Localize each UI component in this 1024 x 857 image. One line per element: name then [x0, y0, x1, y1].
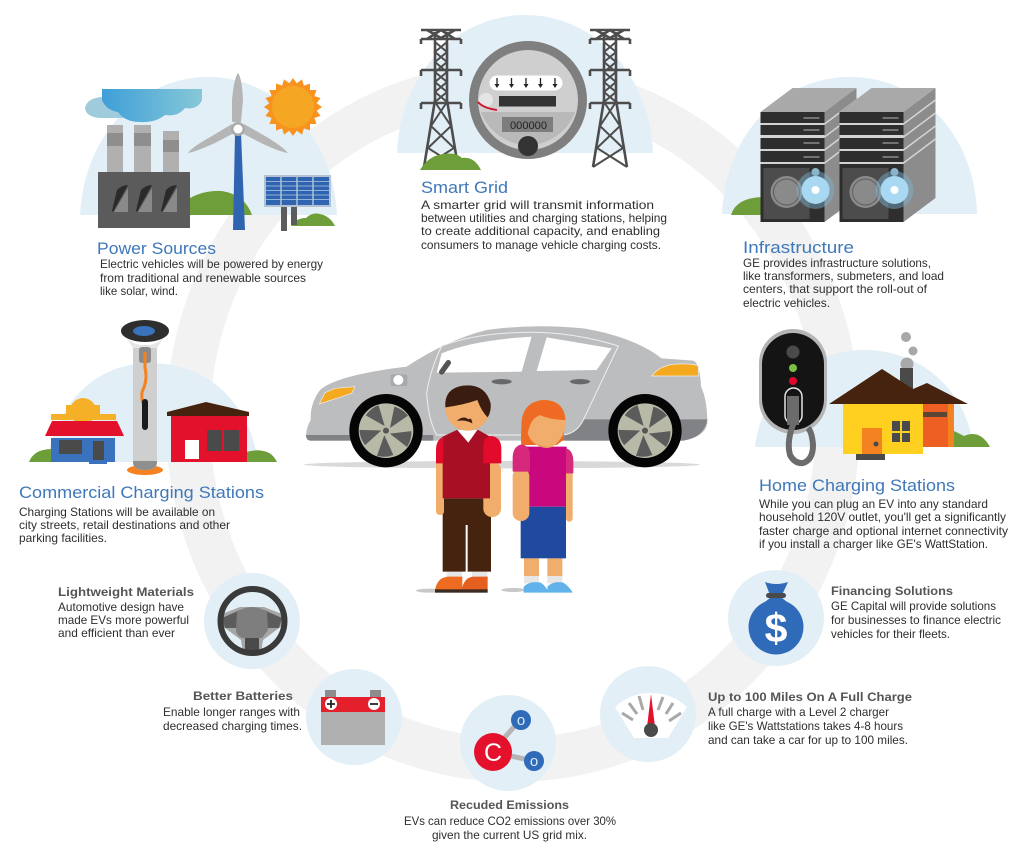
- panel: home charging stations: [755, 329, 1008, 551]
- panel: infrastructure: [722, 77, 977, 310]
- text block: given the current US grid mix.: [432, 828, 587, 842]
- text block: decreased charging times.: [163, 719, 302, 733]
- icon circle: [306, 669, 402, 765]
- text block: [58, 600, 189, 640]
- icon: CO2 molecule: [474, 710, 544, 771]
- text block: A smarter grid will transmit information: [421, 198, 654, 212]
- text block: [100, 257, 323, 298]
- icon: wall charger: [759, 329, 827, 463]
- icon: green hills: [29, 449, 277, 462]
- text block: Charging Stations will be available on: [19, 505, 215, 519]
- text block: like solar, wind.: [100, 284, 178, 298]
- illustration: man: [416, 385, 501, 593]
- icon: green hills: [190, 191, 335, 226]
- car door outline: [427, 332, 618, 435]
- man sleeves: [436, 436, 501, 463]
- man shoes: [416, 572, 488, 593]
- heading: Infrastructure: [743, 238, 854, 257]
- door handles: [492, 379, 590, 384]
- icon: red building: [167, 402, 249, 462]
- heading: Recuded Emissions: [450, 798, 569, 812]
- car shadow: [304, 461, 700, 468]
- icon: electric meter: 000000: [510, 120, 547, 132]
- car body: [306, 326, 707, 441]
- woman shoes: [501, 558, 573, 593]
- text block: city streets, retail destinations and other: [19, 518, 230, 532]
- icon: electric meter: [469, 41, 587, 159]
- text block: A full charge with a Level 2 charger: [708, 705, 889, 719]
- icon: right pylon: [590, 30, 630, 167]
- panel: smart grid: [397, 15, 667, 252]
- man trousers: [443, 498, 491, 572]
- icon: sun: [264, 78, 322, 136]
- text block: [708, 705, 908, 747]
- heading: Commercial Charging Stations: [19, 483, 264, 502]
- icon: green hill: [420, 154, 481, 170]
- icon: money bag: [748, 582, 804, 654]
- text block: like GE's Wattstations takes 4-8 hours: [708, 719, 903, 733]
- text block: household 120V outlet, you'll get a significantly: [759, 510, 1006, 524]
- car windows: [437, 337, 612, 373]
- front wheel: [349, 394, 423, 467]
- icon: shop: [45, 398, 124, 464]
- icon: steering wheel: [220, 589, 284, 653]
- rear wheel: [608, 394, 682, 467]
- icon: gauge: [615, 693, 687, 738]
- text block: made EVs more powerful: [58, 613, 189, 627]
- icon: battery: [321, 690, 385, 745]
- text block: [404, 814, 616, 842]
- text block: [759, 497, 1008, 551]
- icon: solar panel: [264, 175, 331, 231]
- text block: consumers to manage vehicle charging costs.: [421, 238, 661, 252]
- text block: [19, 505, 230, 545]
- icon circle: [600, 666, 696, 762]
- panel: financing solutions: [728, 570, 1001, 666]
- text block: vehicles for their fleets.: [831, 627, 950, 641]
- heading: Up to 100 Miles On A Full Charge: [708, 690, 912, 704]
- text block: centers, that support the roll-out of: [743, 282, 928, 296]
- illustration: dome background: [722, 77, 977, 214]
- illustration: dome background: [397, 15, 653, 153]
- woman top: [522, 447, 567, 507]
- headlight: [319, 387, 355, 404]
- car seat: [442, 363, 448, 372]
- text block: EVs can reduce CO2 emissions over 30%: [404, 814, 616, 828]
- illustration: dome background: [755, 350, 973, 447]
- heading: Smart Grid: [421, 178, 508, 197]
- text block: from traditional and renewable sources: [100, 271, 306, 285]
- icon: money bag: $: [765, 605, 788, 651]
- text block: and efficient than ever: [58, 626, 175, 640]
- woman arms: [513, 468, 573, 522]
- woman hair back: [521, 400, 565, 445]
- car sill: [306, 419, 707, 441]
- illustration: woman: [501, 400, 573, 593]
- text block: and can take a car for up to 100 miles.: [708, 733, 908, 747]
- text block: [421, 198, 667, 252]
- icon circle: [460, 695, 556, 791]
- text block: Enable longer ranges with: [163, 705, 300, 719]
- heading: Power Sources: [97, 239, 216, 258]
- text block: between utilities and charging stations, helping: [421, 211, 667, 225]
- text block: if you install a charger like GE's WattStation.: [759, 537, 988, 551]
- text block: [831, 599, 1001, 641]
- icon: green hill: [954, 431, 990, 447]
- illustration: dome background: [80, 77, 337, 215]
- woman head: [521, 400, 565, 448]
- text block: Automotive design have: [58, 600, 184, 614]
- icon: wind turbine: [188, 73, 288, 230]
- fuel cap: [391, 374, 407, 386]
- panel: power sources: [80, 73, 337, 298]
- heading: Home Charging Stations: [759, 476, 955, 495]
- panel: reduced emissions: [404, 695, 616, 842]
- text block: GE provides infrastructure solutions,: [743, 256, 931, 270]
- man collar: [457, 430, 477, 443]
- icon circle: [728, 570, 824, 666]
- text block: While you can plug an EV into any standard: [759, 497, 988, 511]
- text block: Electric vehicles will be powered by energy: [100, 257, 323, 271]
- man arms: [436, 462, 501, 517]
- icon: CO2 molecule: C: [484, 739, 502, 767]
- icon: clouds: [85, 89, 202, 122]
- icon: server two: [840, 88, 936, 222]
- illustration: car: [304, 326, 707, 468]
- icon: CO2 molecule: o: [517, 712, 525, 729]
- text block: parking facilities.: [19, 531, 107, 545]
- panel: commercial charging stations: [19, 320, 277, 545]
- heading: Financing Solutions: [831, 584, 953, 598]
- icon: left pylon: [421, 30, 461, 167]
- text block: [743, 256, 944, 310]
- icon circle: [204, 573, 300, 669]
- background ring: [188, 84, 838, 760]
- text block: electric vehicles.: [743, 296, 830, 310]
- text block: like transformers, submeters, and load: [743, 269, 944, 283]
- man shirt: [443, 430, 490, 498]
- icon: server one: [760, 88, 856, 222]
- illustration: dome background: [47, 363, 258, 462]
- tail light: [652, 364, 698, 376]
- icon: factory: [98, 125, 190, 228]
- heading: Better Batteries: [193, 689, 293, 703]
- panel: lightweight materials: [58, 573, 300, 669]
- panel: better batteries: [163, 669, 402, 765]
- woman sleeves: [513, 444, 573, 473]
- panel: range: [600, 666, 912, 762]
- man head: [445, 385, 491, 431]
- heading: Lightweight Materials: [58, 585, 194, 599]
- text block: [163, 705, 302, 733]
- woman skirt: [521, 507, 566, 558]
- text block: for businesses to finance electric: [831, 613, 1001, 627]
- icon: charging post: [121, 320, 169, 475]
- icon: house: [829, 332, 968, 460]
- icon: CO2 molecule: o: [530, 753, 538, 770]
- icon: green hill: [731, 197, 762, 215]
- text block: faster charge and optional internet connectivity: [759, 524, 1008, 538]
- text block: GE Capital will provide solutions: [831, 599, 996, 613]
- text block: to create additional capacity, and enabling: [421, 224, 660, 238]
